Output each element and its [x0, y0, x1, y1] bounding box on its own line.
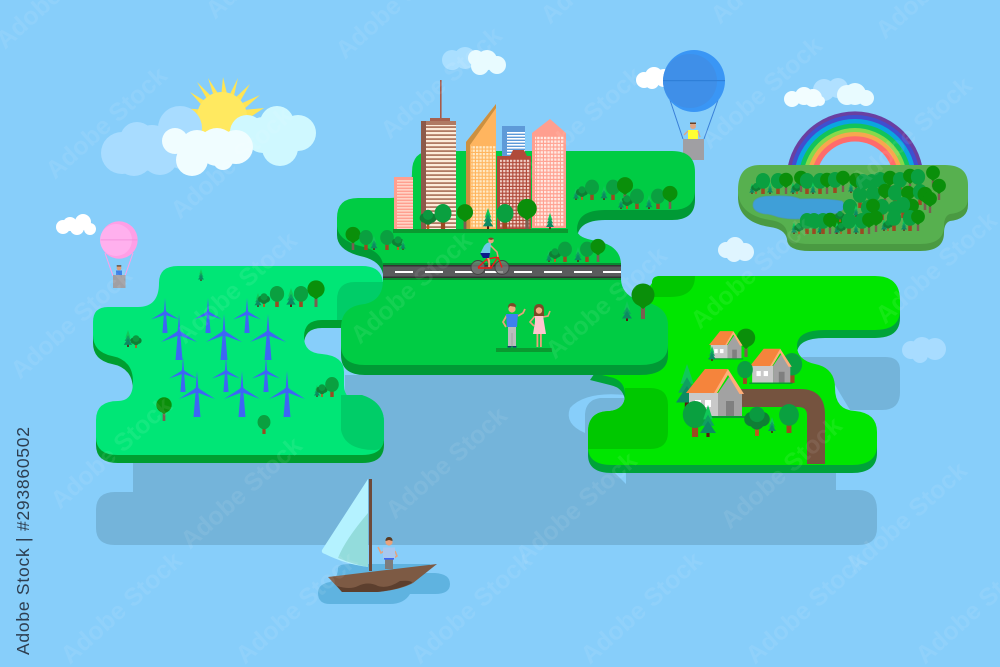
- stock watermark: Adobe Stock: [5, 261, 138, 384]
- stock watermark: Adobe Stock: [375, 21, 508, 144]
- stock watermark: Adobe Stock: [45, 391, 178, 514]
- sail: [322, 479, 368, 567]
- stock watermark: Adobe Stock: [685, 211, 818, 334]
- tree behind small house: [737, 329, 755, 357]
- stock watermark: Adobe Stock: [175, 431, 308, 554]
- island shadows on the sea: [96, 357, 900, 545]
- tree behind medium house: [782, 353, 802, 383]
- cloud: beside blue balloon: [636, 67, 673, 89]
- city buildings: [394, 80, 566, 229]
- stock watermark: Adobe Stock: [510, 446, 643, 569]
- building: pink gabled tower: [532, 119, 566, 228]
- mast: [369, 479, 372, 571]
- rainbow: [788, 111, 922, 165]
- sailboat: [318, 479, 450, 604]
- light crescent in shadow: [569, 394, 626, 484]
- cloud: small left: [56, 214, 96, 235]
- tree row: upper right: [573, 177, 677, 209]
- building: blue back tower: [502, 126, 525, 158]
- cloud: top right trio: [784, 78, 874, 107]
- stock watermark: Adobe Stock: [405, 546, 538, 667]
- stock watermark: Adobe Stock: [165, 101, 298, 224]
- blue hot air balloon: [663, 50, 725, 160]
- cloud: large pale blue: [101, 106, 202, 176]
- stock watermark: Adobe Stock: [575, 546, 708, 667]
- stock watermark: Adobe Stock: [695, 31, 828, 154]
- trees right of couple: [622, 284, 654, 321]
- road: [383, 263, 621, 280]
- small house: [708, 331, 743, 360]
- hull: [328, 564, 437, 592]
- stock watermark: Adobe Stock: [715, 411, 848, 534]
- stock watermark: Adobe Stock: [55, 546, 188, 667]
- stock watermark: Adobe Stock: [230, 546, 363, 667]
- tree row: above road right: [546, 239, 605, 262]
- inner sail shade: [338, 513, 368, 567]
- city trees: [420, 199, 554, 229]
- hull wave mark: [337, 581, 412, 592]
- stock watermark: Adobe Stock: [740, 546, 873, 667]
- cloud: small central right: [718, 237, 754, 262]
- sailor: [378, 537, 397, 569]
- lake: [753, 196, 844, 219]
- foreground trees: [683, 401, 799, 437]
- tree beside medium house: [737, 361, 753, 384]
- building: small pink block: [394, 177, 413, 229]
- stock watermark: Adobe Stock: [845, 71, 978, 194]
- village island: [588, 276, 900, 473]
- wind farm trees: [124, 269, 339, 434]
- large pine: [676, 364, 698, 408]
- stock watermark: Adobe Stock: [380, 401, 513, 524]
- central city island: [337, 80, 695, 375]
- cyclist: [471, 238, 509, 274]
- water reflection: [318, 564, 450, 604]
- island overlap tint: [337, 282, 384, 450]
- floating forest island: [738, 165, 968, 251]
- stock watermark: Adobe Stock: [170, 226, 303, 349]
- pink hot air balloon: [100, 221, 138, 288]
- forest trees: [749, 166, 946, 234]
- cloud: large white: [162, 128, 253, 176]
- wind farm island: [93, 266, 384, 463]
- man waving: [503, 303, 525, 348]
- tree row: above road left: [346, 227, 406, 250]
- cloud: large cyan: [230, 106, 316, 166]
- stock watermark: Adobe Stock: [345, 226, 478, 349]
- building: orange slanted tower: [466, 104, 496, 229]
- overlap tints: [588, 276, 695, 449]
- stock watermark: Adobe Stock: [870, 206, 1000, 329]
- building: brown skyscraper: [421, 80, 456, 229]
- stock watermark: Adobe Stock: [40, 61, 173, 184]
- grass under couple: [496, 348, 552, 352]
- medium house: [749, 349, 792, 384]
- cloud: faint right: [902, 337, 946, 363]
- stock watermark: Adobe Stock: [840, 456, 973, 579]
- stock image id: Adobe Stock | #293860502: [13, 427, 33, 655]
- stock watermark: Adobe Stock: [515, 61, 648, 184]
- large house: [685, 369, 745, 418]
- building: red brick tower: [497, 150, 531, 229]
- dirt road: [740, 389, 825, 464]
- tree by small house: [708, 346, 716, 361]
- wind turbines: [151, 298, 305, 417]
- cloud: top centre pair: [442, 47, 506, 75]
- stock watermark: Adobe Stock: [540, 241, 673, 364]
- woman waving: [530, 304, 550, 347]
- grass strip under city: [393, 229, 568, 233]
- sun: [182, 77, 264, 142]
